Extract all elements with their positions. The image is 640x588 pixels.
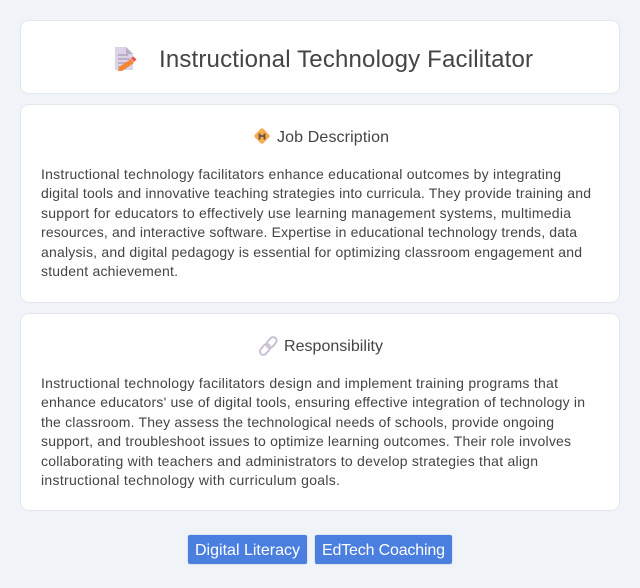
tag: digital literacy: Digital Literacy	[195, 542, 300, 559]
icon: document with pencil	[115, 47, 136, 71]
tag: edtech coaching: EdTech Coaching	[322, 542, 445, 559]
text block: job description: resources, and interactive software. Expertise in educational technology trends, data	[41, 224, 577, 240]
text block: job description: student achievement.	[41, 263, 178, 279]
text block: job description: support for educators to effectively use learning management systems, multimedia	[41, 205, 571, 221]
text block: responsibility: the classroom. They assess the technological needs of schools, provide ongoing	[41, 414, 554, 430]
text block: responsibility: collaborating with teachers and administrators to develop strategies that align	[41, 453, 538, 469]
text block: job description	[41, 166, 591, 279]
icon: diamond sign	[254, 128, 270, 144]
text block: responsibility: Instructional technology facilitators design and implement training programs that	[41, 375, 558, 391]
tag: digital literacy	[188, 534, 308, 564]
text block: responsibility: enhance educators' use of digital tools, ensuring effective integration of technology in	[41, 394, 585, 410]
heading: responsibility: Responsibility	[284, 338, 383, 355]
icon: chain link	[258, 336, 278, 356]
text block: job description: digital tools and innovative teaching strategies into curricula. They provide training and	[41, 185, 591, 201]
text block: responsibility: support, and troubleshoot issues to optimize learning outcomes. Their role involves	[41, 433, 571, 449]
heading: job description: Job Description	[277, 129, 389, 146]
tag: edtech coaching	[314, 534, 452, 564]
text block: responsibility	[41, 375, 585, 488]
title text: Instructional Technology Facilitator	[159, 46, 533, 73]
text block: responsibility: instructional technology with curriculum goals.	[41, 472, 340, 488]
panel: job description	[20, 104, 620, 302]
panel: responsibility	[20, 314, 620, 510]
text block: job description: Instructional technology facilitators enhance educational outcomes by integrating	[41, 166, 561, 182]
text block: job description: analysis, and digital pedagogy is essential for optimizing classroom engagement and	[41, 244, 582, 260]
panel: title	[20, 20, 620, 94]
